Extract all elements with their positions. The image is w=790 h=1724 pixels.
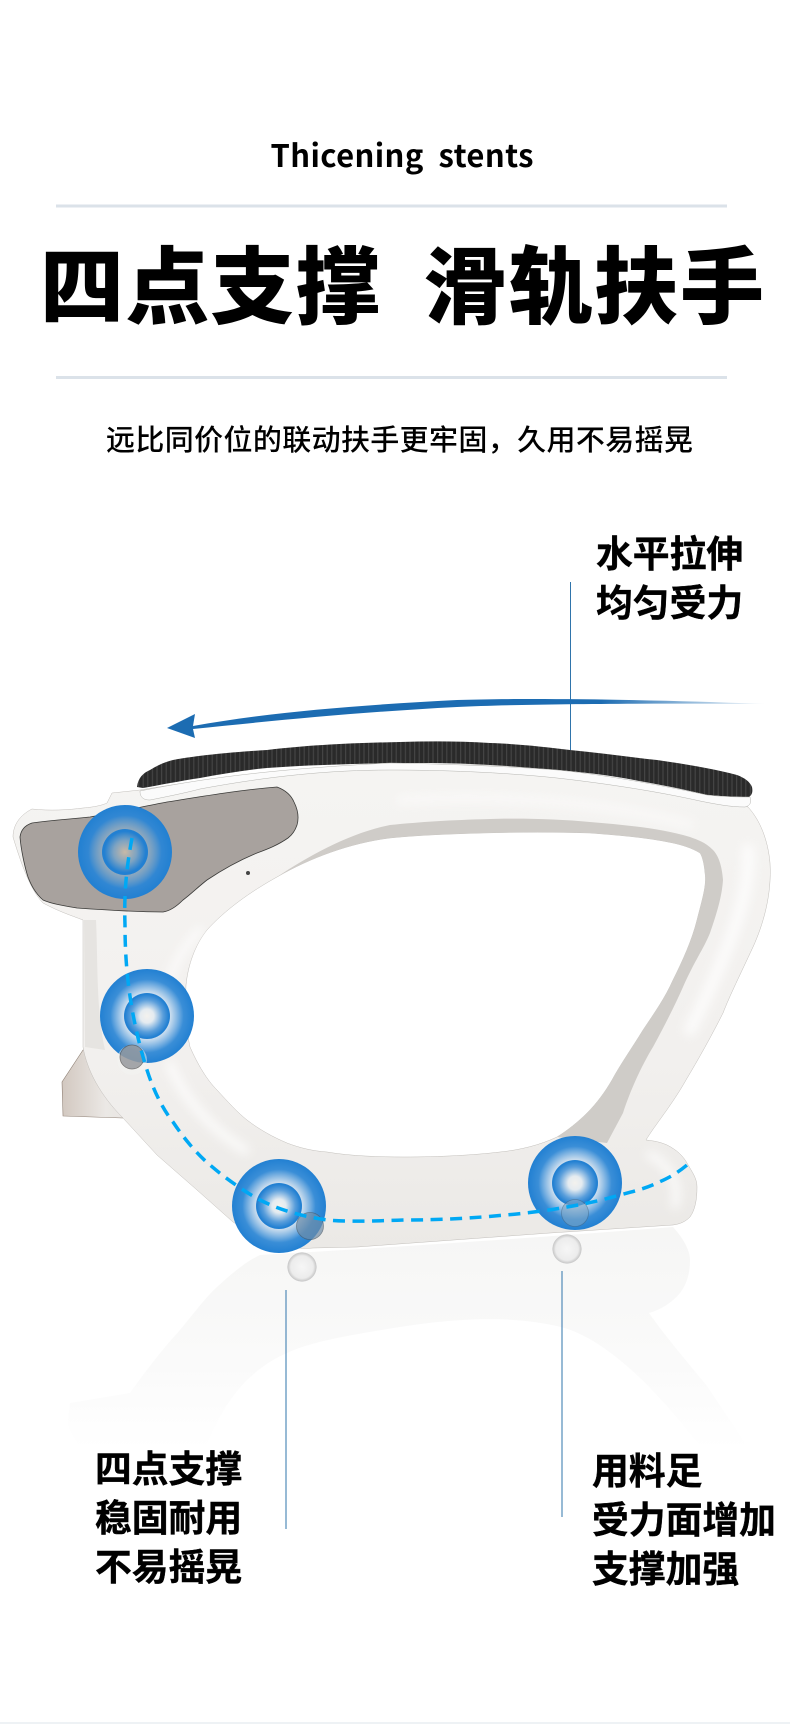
white rim under pad <box>140 763 751 807</box>
pin hole <box>246 871 250 875</box>
label: four point support: 四点支撑 <box>95 1439 242 1493</box>
support point 2 <box>100 969 194 1063</box>
main heading: 四点支撑 <box>40 221 380 342</box>
rear foot <box>62 1050 135 1118</box>
label: sufficient material: 受力面增加 <box>592 1490 776 1544</box>
leader line: top <box>570 582 571 752</box>
main heading: 滑轨扶手 <box>423 221 764 342</box>
reflection of armrest <box>68 1227 747 1450</box>
leader line: bottom right <box>562 1271 563 1517</box>
leader line: bottom left <box>286 1290 287 1529</box>
arrow: stretch direction <box>167 699 765 738</box>
label: four point support: 不易摇晃 <box>95 1537 242 1591</box>
label: sufficient material: 支撑加强 <box>592 1539 739 1593</box>
reflected screw right <box>552 1234 582 1264</box>
label: four point support: 稳固耐用 <box>95 1488 242 1542</box>
bottom strip <box>0 1722 790 1724</box>
hand pad <box>20 787 298 912</box>
mesh top pad <box>137 741 752 797</box>
label: horizontal stretch: 水平拉伸 <box>596 524 743 578</box>
armrest <box>13 741 770 1248</box>
label: sufficient material <box>592 1441 776 1593</box>
title: Thicening stents <box>270 131 534 176</box>
label: horizontal stretch: 均匀受力 <box>596 573 743 627</box>
armrest body <box>13 765 770 1248</box>
support point 1 <box>78 805 172 899</box>
inner shadow band <box>277 819 723 1143</box>
label: horizontal stretch <box>596 524 743 627</box>
reflected screw left <box>287 1252 317 1282</box>
screw 1 <box>117 1045 147 1075</box>
support point 4 <box>528 1136 622 1230</box>
support point 3 <box>232 1159 326 1253</box>
bottom divider <box>56 376 727 379</box>
screw 2 <box>296 1212 324 1240</box>
label: four point support <box>95 1439 242 1591</box>
dashed force line <box>125 838 687 1221</box>
stem left shading <box>84 920 105 1050</box>
top divider <box>56 204 727 208</box>
screw 3 <box>562 1200 588 1226</box>
label: sufficient material: 用料足 <box>592 1441 702 1495</box>
soft highlights <box>164 798 748 1205</box>
subtitle: 远比同价位的联动扶手更牢固，久用不易摇晃 <box>106 417 693 459</box>
